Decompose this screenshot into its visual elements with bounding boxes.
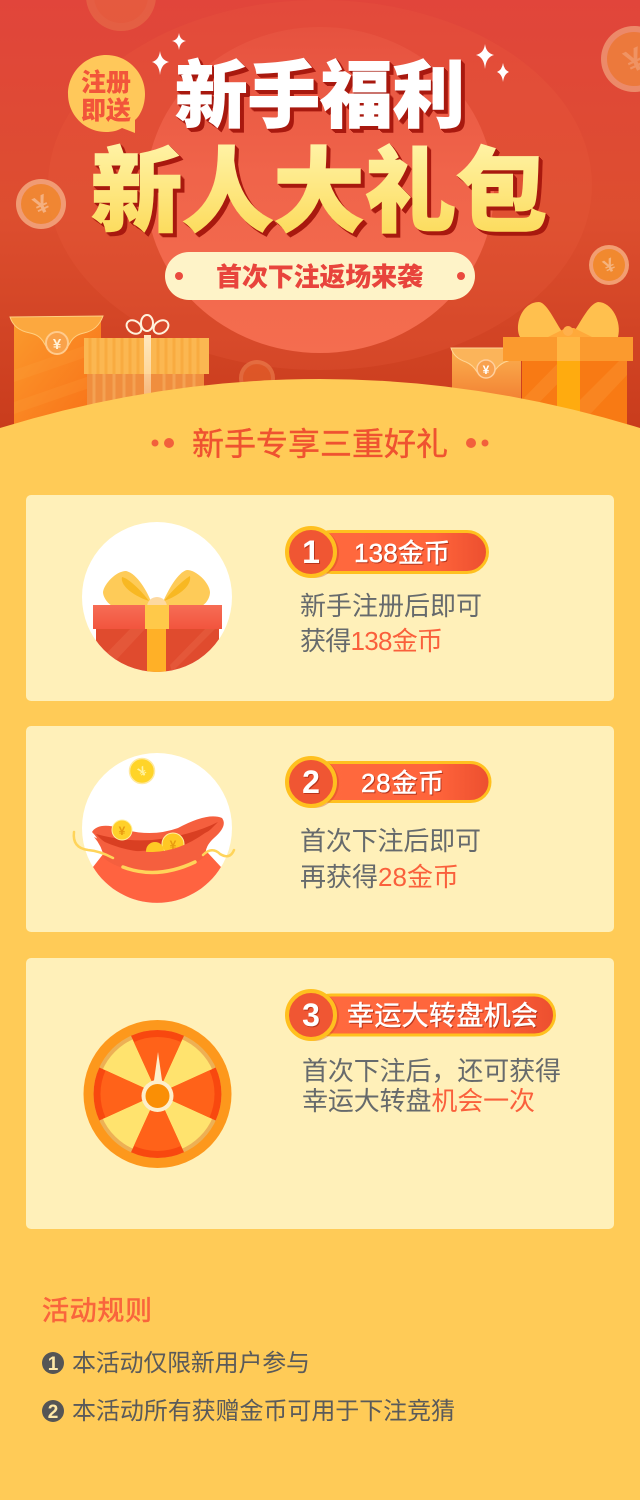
- title: 新人大礼包: 新人大礼包: [91, 142, 547, 244]
- heading: 活动规则: 活动规则: [42, 1296, 152, 1326]
- coin: top right: [601, 26, 640, 92]
- rule 1: 本活动仅限新用户参与: [72, 1350, 310, 1377]
- badge: 138金币: [287, 528, 488, 578]
- badge: 注册即送: 即送: [81, 97, 131, 125]
- panel: card 2: [26, 726, 614, 932]
- heading: 新手专享三重好礼: 新手专享三重好礼: [192, 426, 448, 462]
- rule 2: 本活动所有获赠金币可用于下注竞猜: [72, 1398, 455, 1425]
- coin: lower middle: [239, 360, 275, 396]
- rule 2: 2: [48, 1402, 58, 1423]
- icon: large orange gift: [503, 302, 633, 431]
- panel: hero banner: [0, 0, 640, 431]
- pill: 首次下注返场来袭: [165, 252, 475, 300]
- icon: money bag: ¥: [135, 763, 150, 780]
- text: card 3 description: 首次下注后，还可获得: [302, 1056, 561, 1086]
- icon: lucky wheel: [84, 1020, 232, 1168]
- icon: left envelope: [10, 316, 103, 428]
- outer glow circle: [48, 0, 592, 370]
- text: card 3 description: 幸运大转盘机会一次: [302, 1086, 535, 1116]
- text: card 1 description: 获得138金币: [300, 626, 443, 656]
- coin: left: ¥: [29, 189, 54, 221]
- icon: left envelope: ¥: [53, 336, 62, 353]
- text: card 3 description: [302, 1056, 561, 1116]
- sparkles: [152, 33, 509, 82]
- coin: right: [589, 245, 629, 285]
- icon: small envelope: [451, 348, 522, 420]
- badge: 28金币: 2: [302, 764, 320, 800]
- icon: small envelope: ¥: [483, 363, 490, 377]
- badge: 幸运大转盘机会: 3: [302, 997, 320, 1033]
- pill: 首次下注返场来袭: 首次下注返场来袭: [216, 262, 423, 292]
- inner circle: [146, 27, 494, 353]
- text: card 1 description: 新手注册后即可: [300, 591, 482, 621]
- badge: 28金币: 28金币: [361, 768, 444, 798]
- text: card 2 description: 再获得28金币: [300, 862, 459, 892]
- badge: 幸运大转盘机会: [287, 991, 554, 1041]
- icon: money bag: ¥: [170, 838, 177, 852]
- badge: 幸运大转盘机会: 幸运大转盘机会: [347, 1001, 538, 1031]
- coin: right: ¥: [600, 254, 619, 278]
- text: card 2 description: [300, 826, 481, 892]
- icon: striped gift: [84, 315, 209, 414]
- badge: 138金币: 138金币: [354, 538, 450, 568]
- text: card 2 description: 首次下注后即可: [300, 826, 481, 856]
- coin: left: [16, 179, 66, 229]
- panel: card 3: [26, 958, 614, 1229]
- panel: yellow curved body top: [0, 379, 640, 460]
- icon: gift: [82, 522, 232, 679]
- badge: 28金币: [287, 758, 490, 808]
- badge: 注册即送: 注册: [81, 69, 131, 97]
- badge: 138金币: 1: [302, 534, 320, 570]
- icon: money bag: ¥: [119, 824, 126, 838]
- text: card 1 description: [300, 591, 482, 656]
- rule 1: 1: [48, 1354, 59, 1375]
- panel: card 1: [26, 495, 614, 701]
- badge: 注册即送: [68, 55, 145, 133]
- coin: top left: [86, 0, 156, 31]
- icon: money bag: [74, 753, 234, 903]
- title: 新手福利: 新手福利: [175, 56, 465, 137]
